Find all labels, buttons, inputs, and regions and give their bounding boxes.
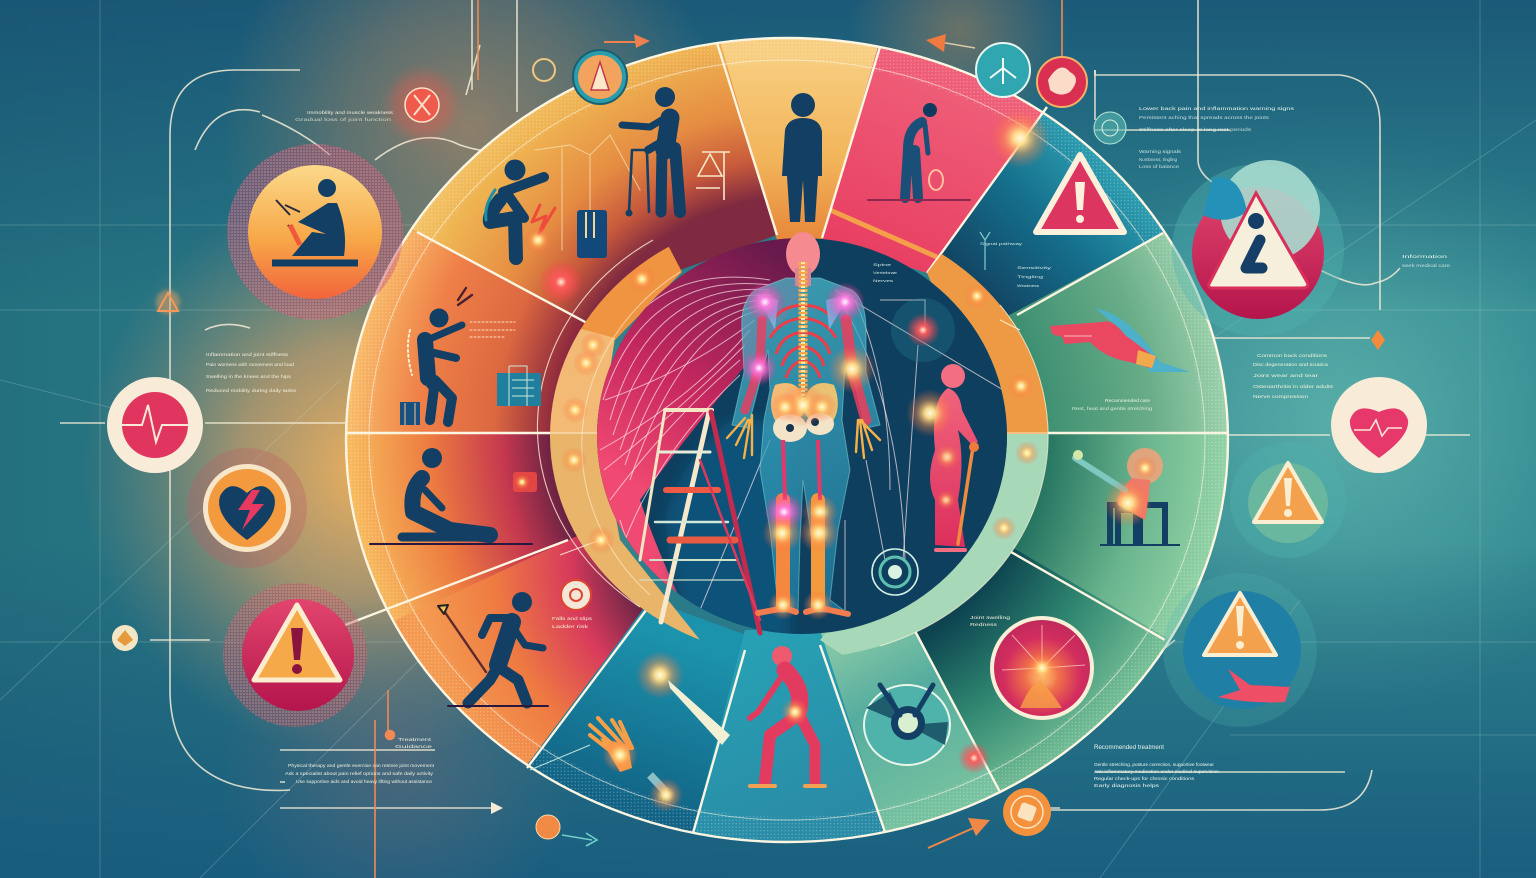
red sphere xyxy=(992,618,1092,718)
small circle icon near ring xyxy=(561,580,591,610)
round icon: warning on crimson xyxy=(223,583,367,727)
suitcase xyxy=(577,210,607,258)
ring: lower right green segment xyxy=(820,434,1048,655)
text block: bottom right: Regular check-ups for chronic conditions xyxy=(1094,776,1195,782)
text block: medallion labels: Vertebrae xyxy=(873,270,898,275)
wedge: joint disc xyxy=(821,612,998,830)
orange stripe in red wedge xyxy=(830,210,937,257)
text block: medallion labels: Nerves xyxy=(873,278,893,283)
figure: knee pain xyxy=(486,135,640,258)
arrow: bottom left white xyxy=(491,802,503,814)
text block: top right: Numbness, tingling xyxy=(1139,157,1177,163)
text block: far right label: seek medical care xyxy=(1402,263,1450,269)
text block: top left: Immobility and muscle weakness xyxy=(307,110,394,116)
arrow: bottom left teal xyxy=(562,833,597,846)
text block: hand wedge label: Recommended care xyxy=(1105,398,1151,403)
radio box xyxy=(497,366,541,406)
text block: left middle: Reduced mobility during daily tasks xyxy=(206,388,297,393)
center medallion xyxy=(590,230,1020,640)
text block: left middle: Swelling in the knees and the hips xyxy=(206,374,292,379)
text block: right middle: Joint wear and tear xyxy=(1253,373,1319,378)
text block: top right: Persistent aching that spreads across the joints xyxy=(1139,115,1270,121)
text block: top right: Warning signals xyxy=(1139,149,1182,155)
text block: right middle xyxy=(1253,353,1334,399)
wedge: hand pain xyxy=(528,609,744,831)
arrow: bottom right orange xyxy=(928,818,990,848)
small box xyxy=(400,402,420,425)
text block: left middle: Inflammation and joint stiffness xyxy=(206,352,289,357)
figure: hurting xyxy=(408,288,515,422)
squatting figure xyxy=(750,646,825,786)
text block: right middle: Nerve compression xyxy=(1253,394,1309,399)
figure: runner xyxy=(438,592,548,706)
text block: bottom right: Anti-inflammatory medication under medical supervision xyxy=(1094,769,1219,775)
wedge: hand pointing xyxy=(1008,233,1227,432)
text block: left middle xyxy=(206,352,297,393)
skeleton body xyxy=(727,232,880,620)
warning icon: triangle with hand xyxy=(1163,573,1317,727)
text block: lower wedges xyxy=(552,615,1011,629)
wedge: warning xyxy=(942,114,1163,316)
wedge: runner xyxy=(394,536,643,764)
ring: upper right orange segment xyxy=(927,254,1048,434)
text block: lower wedges: Joint swelling xyxy=(970,615,1011,620)
text block: right middle: Disc degeneration and sciatica xyxy=(1253,362,1329,367)
text block: bottom left xyxy=(285,737,435,785)
text block: medallion labels: Spine xyxy=(873,262,892,267)
text block: bottom right xyxy=(1094,745,1219,789)
figure: bent person xyxy=(868,103,970,200)
ring: left pale segment xyxy=(550,329,615,433)
text block: bottom right: Recommended treatment xyxy=(1094,745,1164,751)
text block: medallion labels: Signal pathway xyxy=(980,241,1022,246)
hip bones xyxy=(771,383,804,428)
seated joint figure xyxy=(1073,448,1180,545)
small icon: warning glyph left xyxy=(156,290,180,314)
hand with sparks xyxy=(530,651,730,812)
legs xyxy=(776,500,790,605)
text block: bottom right: Early diagnosis helps xyxy=(1094,783,1160,789)
text block: bottom left: Ask a specialist about pain relief options and safe daily activity xyxy=(285,771,434,777)
text block: bottom left: Use supportive aids and avoid heavy lifting without assistance xyxy=(296,779,432,785)
orange star marker xyxy=(1371,330,1385,350)
wheel of wedges xyxy=(347,39,1227,841)
arrow: top right orange xyxy=(926,34,975,52)
spine xyxy=(798,262,808,410)
center target node xyxy=(891,298,955,362)
ring: lower left tan segment xyxy=(550,433,700,640)
wedge: seated joint xyxy=(1014,434,1227,639)
small icon: ring node xyxy=(533,59,555,81)
glows xyxy=(745,282,785,322)
wedge: hurting figure xyxy=(347,230,584,432)
round icon: broken heart xyxy=(187,448,307,568)
central pain ring xyxy=(550,246,1048,655)
text block: top right: Lower back pain and inflammation warning signs xyxy=(1139,106,1295,112)
wedge: squatting figure xyxy=(694,630,884,841)
small icon: teal ring xyxy=(1094,112,1126,144)
text block: bottom left: Treatment xyxy=(398,737,432,743)
text block: bottom right: Gentle stretching, posture correction, supportive footwear xyxy=(1094,762,1214,768)
wedge: knee pain and cane user xyxy=(412,44,776,321)
small icon: cyan road sign xyxy=(573,50,627,104)
text block: far right label xyxy=(1402,254,1450,269)
text block: hand wedge label xyxy=(1072,398,1153,411)
small pain mark xyxy=(929,170,943,190)
warning triangle xyxy=(1036,155,1124,232)
wedge: standing figure xyxy=(717,30,880,240)
arms xyxy=(745,320,762,410)
figure: kneeling xyxy=(370,448,532,544)
arrow: top left orange xyxy=(604,34,650,48)
text block: left middle: Pain worsens with movement and load xyxy=(206,362,294,367)
small icon: red hands xyxy=(1037,57,1087,107)
hands xyxy=(727,415,880,458)
ring: upper left orange segment xyxy=(580,246,682,340)
ring thin arcs xyxy=(537,240,1048,646)
text block: lower wedges: Ladder risk xyxy=(552,624,589,629)
text block: top left xyxy=(295,110,394,123)
small sign post in teal wedge xyxy=(980,232,990,270)
text block: medallion labels: Weakness xyxy=(1017,283,1039,288)
text block: top right: Stiffness after sleep or long rest periods xyxy=(1139,127,1252,133)
orange badge xyxy=(1003,788,1051,836)
wedge: kneeling figure xyxy=(347,434,577,621)
side figure with cane xyxy=(906,364,979,550)
text block: medallion labels: Tingling xyxy=(1017,274,1043,279)
small triangle sign xyxy=(696,152,730,200)
text block: top left: Gradual loss of joint function xyxy=(295,117,392,123)
lower target node xyxy=(872,549,918,595)
ring sparks xyxy=(513,108,1050,554)
shoulder blades xyxy=(757,295,778,330)
orange vertical accent lines xyxy=(375,0,1062,878)
round icon: pulse xyxy=(107,377,203,473)
outer dotted band xyxy=(359,50,1215,830)
wedge: red sphere xyxy=(917,548,1168,790)
body silhouette xyxy=(732,278,880,612)
figure: cane user xyxy=(622,87,680,216)
text block: lower wedges: Falls and slips xyxy=(552,616,593,621)
text block: lower wedges: Redness xyxy=(970,622,998,627)
small icon: crossed circle xyxy=(390,73,454,137)
text block: hand wedge label: Rest, heat and gentle stretching xyxy=(1072,406,1153,411)
text block: medallion labels xyxy=(873,241,1051,288)
text block: top right: Loss of balance xyxy=(1139,164,1179,170)
text block: right middle: Osteoarthritis in older adults xyxy=(1253,384,1334,389)
round icon: hurt seated person xyxy=(227,144,403,320)
text block: bottom left: Guidance xyxy=(395,744,433,750)
nerve lines xyxy=(600,276,1002,610)
text block: bottom left: Physical therapy and gentle exercise can restore joint movement xyxy=(288,763,435,769)
small orange badge bottom left xyxy=(536,815,560,839)
text block: top right xyxy=(1139,106,1295,170)
wedge: bent figure xyxy=(822,40,1047,273)
text block: right middle: Common back conditions xyxy=(1257,353,1328,358)
head xyxy=(786,232,820,276)
big warning icon: information xyxy=(1172,160,1344,336)
hand pointing xyxy=(1050,308,1190,372)
text block: far right label: Information xyxy=(1402,254,1448,260)
wheel outlines and spokes xyxy=(345,38,1228,842)
text block: medallion labels: Sensitivity xyxy=(1017,265,1051,270)
warning icon: orange triangle in teal xyxy=(1230,442,1346,558)
small icon: turbine xyxy=(976,43,1030,97)
round icon: heart xyxy=(1331,377,1427,473)
figure: standing person xyxy=(782,93,822,222)
ladder xyxy=(640,410,760,633)
joint disc xyxy=(864,685,990,774)
ribs xyxy=(770,305,836,378)
small icon: cream diamond xyxy=(112,625,138,651)
